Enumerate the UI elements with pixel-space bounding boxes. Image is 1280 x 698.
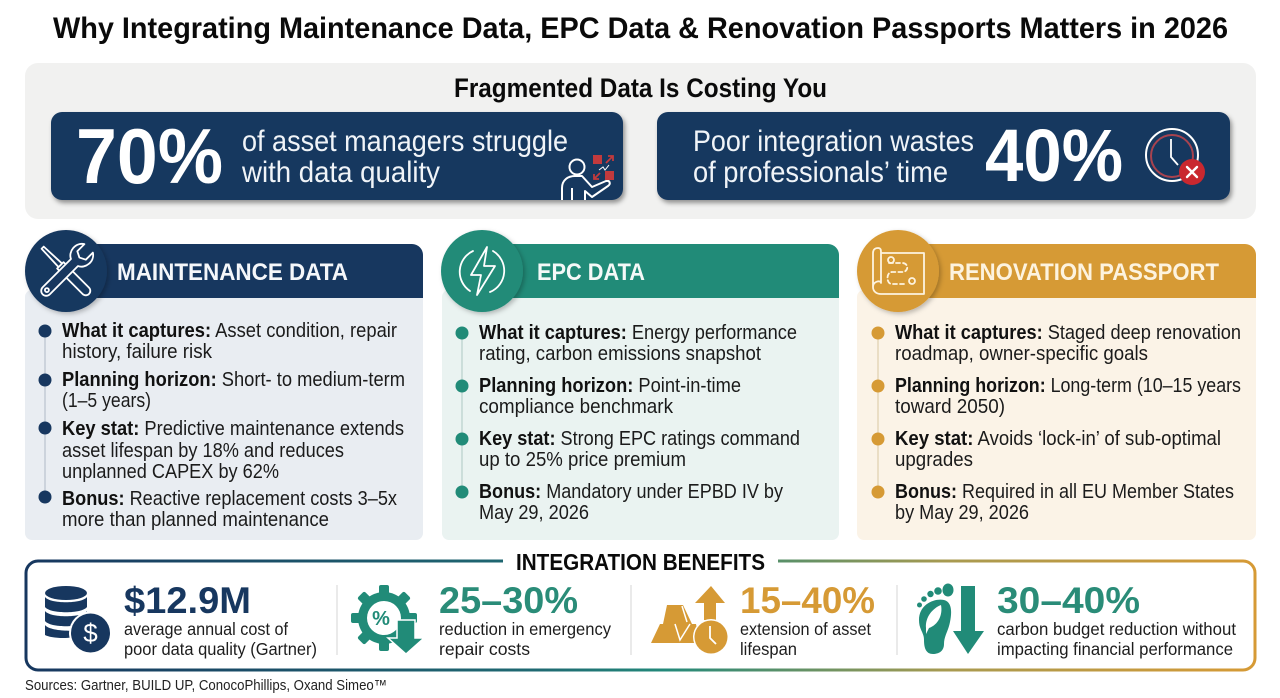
text: planning horizon: Planning horizon: Long-term (10–15 years	[895, 375, 1241, 397]
text: what it captures	[479, 322, 797, 365]
text: bonus	[479, 481, 783, 524]
text: bonus	[62, 488, 397, 531]
benefit: emergency repair costs: reduction in emergency	[439, 619, 611, 639]
header bar	[480, 244, 839, 298]
icon: gear with arrow	[351, 585, 424, 654]
callout: 70 percent: of asset managers struggle	[242, 125, 568, 158]
text: bonus: more than planned maintenance	[62, 509, 329, 531]
text: what it captures: What it captures: Staged deep renovation	[895, 322, 1241, 344]
text: key stat: asset lifespan by 18% and reduces	[62, 440, 344, 462]
icon: energy bolt	[441, 230, 523, 312]
benefit: cost of poor data: average annual cost of	[124, 619, 288, 639]
timeline bullets	[38, 324, 52, 504]
benefit: cost of poor data: $12.9M	[124, 580, 251, 621]
text: key stat: unplanned CAPEX by 62%	[62, 461, 279, 483]
text: planning horizon: Planning horizon: Point-in-time	[479, 375, 741, 397]
benefits heading: INTEGRATION BENEFITS	[516, 549, 765, 575]
text: key stat: Key stat: Strong EPC ratings command	[479, 428, 800, 450]
timeline bullets	[872, 326, 884, 498]
callout: 40 percent	[657, 112, 1230, 200]
text: what it captures	[895, 322, 1241, 365]
text: bonus: Bonus: Mandatory under EPBD IV by	[479, 481, 783, 503]
icon: gear with arrow: %	[372, 608, 390, 630]
panel: EPC data	[441, 230, 839, 540]
text: bonus: by May 29, 2026	[895, 502, 1029, 524]
icon: roadmap	[857, 230, 939, 312]
text: what it captures	[62, 320, 397, 363]
title: Why Integrating Maintenance Data, EPC Data & Renovation Passports Matters in 2026	[53, 12, 1228, 45]
text: what it captures: history, failure risk	[62, 341, 213, 363]
icon: footprint with leaf and arrow	[917, 584, 984, 654]
text: what it captures: roadmap, owner-specific goals	[895, 343, 1148, 365]
benefit: carbon budget: 30–40%	[997, 580, 1140, 621]
text: what it captures: What it captures: Asset condition, repair	[62, 320, 397, 342]
header label: MAINTENANCE DATA	[117, 259, 348, 286]
benefit: carbon budget: carbon budget reduction without	[997, 619, 1236, 639]
icon: database and coin	[45, 586, 112, 654]
text: planning horizon: Planning horizon: Short- to medium-term	[62, 369, 405, 391]
text: planning horizon: (1–5 years)	[62, 390, 151, 412]
icon: tools	[25, 230, 107, 312]
text: what it captures: rating, carbon emissions snapshot	[479, 343, 761, 365]
benefit: asset lifespan: 15–40%	[740, 580, 875, 621]
text: key stat	[895, 428, 1221, 471]
icon: person with data	[562, 155, 614, 200]
text: key stat: upgrades	[895, 449, 973, 471]
header label: EPC DATA	[537, 259, 645, 286]
panel: fragmented data	[25, 63, 1256, 219]
text: bonus: Bonus: Reactive replacement costs 3–5x	[62, 488, 397, 510]
benefit: emergency repair costs: 25–30%	[439, 580, 578, 621]
callout: 40 percent: of professionals’ time	[693, 156, 948, 189]
text: planning horizon	[479, 375, 741, 418]
timeline bullets	[456, 326, 468, 498]
panel: maintenance data	[25, 230, 423, 540]
benefit: cost of poor data: poor data quality (Gartner)	[124, 639, 317, 659]
text: bonus: May 29, 2026	[479, 502, 589, 524]
callout: 70 percent: 70%	[76, 112, 223, 200]
text: key stat: up to 25% price premium	[479, 449, 686, 471]
text: bonus: Bonus: Required in all EU Member States	[895, 481, 1234, 503]
benefit: asset lifespan	[651, 580, 875, 659]
icon: clock with cross	[1146, 129, 1205, 185]
callout: 40 percent: Poor integration wastes	[693, 125, 974, 158]
benefit: cost of poor data	[45, 580, 317, 659]
sources footnote: Sources: Gartner, BUILD UP, ConocoPhillips, Oxand Simeo™	[25, 678, 387, 694]
text: bonus	[895, 481, 1234, 524]
header bar	[895, 244, 1256, 298]
panel: renovation passport	[857, 230, 1256, 540]
header label: RENOVATION PASSPORT	[949, 259, 1219, 286]
text: key stat: Key stat: Predictive maintenance extends	[62, 418, 404, 440]
text: key stat: Key stat: Avoids ‘lock-in’ of sub-optimal	[895, 428, 1221, 450]
benefit: carbon budget	[917, 580, 1236, 659]
callout: 40 percent: 40%	[985, 114, 1123, 197]
benefit: asset lifespan: lifespan	[740, 639, 797, 659]
benefit: emergency repair costs	[351, 580, 611, 659]
benefit: emergency repair costs: repair costs	[439, 639, 530, 659]
header bar	[60, 244, 423, 298]
panel: integration benefits	[26, 549, 1255, 670]
text: planning horizon	[62, 369, 405, 412]
text: key stat	[479, 428, 800, 471]
icon: gold bars, arrow and clock	[651, 586, 729, 655]
text: key stat	[62, 418, 404, 483]
panel heading: Fragmented Data Is Costing You	[454, 73, 827, 103]
text: planning horizon	[895, 375, 1241, 418]
callout: 70 percent: with data quality	[241, 156, 440, 189]
icon: database and coin: $	[83, 618, 98, 648]
text: planning horizon: compliance benchmark	[479, 396, 674, 418]
callout: 70 percent	[51, 112, 623, 200]
benefit: asset lifespan: extension of asset	[740, 619, 871, 639]
text: what it captures: What it captures: Energy performance	[479, 322, 797, 344]
text: planning horizon: toward 2050)	[895, 396, 1005, 418]
benefit: carbon budget: impacting financial performance	[997, 639, 1233, 659]
